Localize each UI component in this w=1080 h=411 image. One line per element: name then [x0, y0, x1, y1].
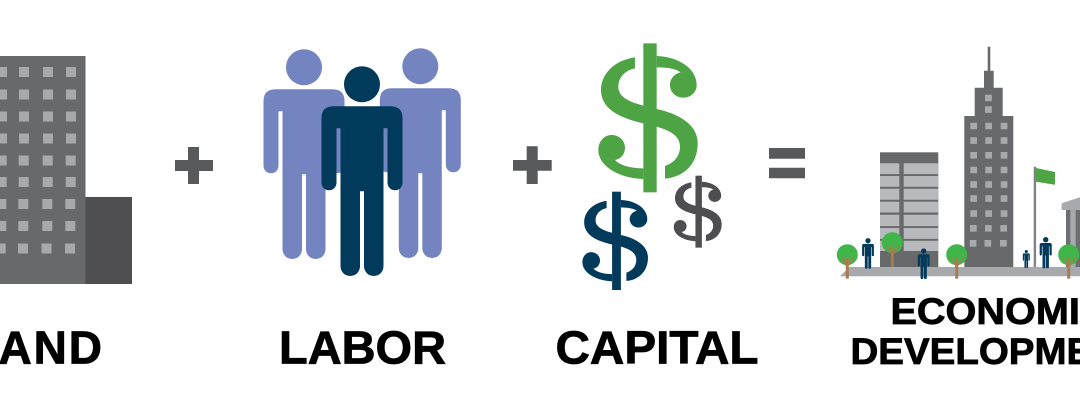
- icon: gray dollar: [674, 176, 722, 248]
- small person: [1040, 237, 1052, 268]
- tree: [882, 232, 903, 267]
- small person: [918, 248, 930, 279]
- label: labor: LABOR: [279, 322, 446, 374]
- skyscraper: [964, 47, 1013, 267]
- tree: [946, 244, 967, 279]
- person: center: [322, 66, 402, 276]
- ground: [840, 267, 1080, 276]
- tree: [837, 244, 858, 279]
- illustration: city scene: [837, 47, 1080, 279]
- person: left: [264, 49, 344, 259]
- person: right: [380, 48, 461, 258]
- label: capital: CAPITAL: [556, 322, 758, 374]
- small person: [1023, 250, 1030, 268]
- icon: large green dollar: [598, 43, 698, 192]
- icon: plus sign: [513, 146, 552, 184]
- icon: navy dollar: [582, 192, 648, 290]
- icon: land buildings: [0, 56, 132, 284]
- icon: dollar signs: [582, 43, 722, 290]
- tree: [1058, 244, 1079, 279]
- small person: [862, 238, 874, 269]
- icon: equals sign: [769, 148, 805, 178]
- flag: [1034, 167, 1055, 267]
- bank with columns: [1062, 197, 1080, 267]
- label: land: AND: [0, 322, 104, 374]
- mid-rise building: [880, 152, 938, 267]
- icon: plus sign: [175, 147, 213, 184]
- icon: three people: [264, 48, 461, 276]
